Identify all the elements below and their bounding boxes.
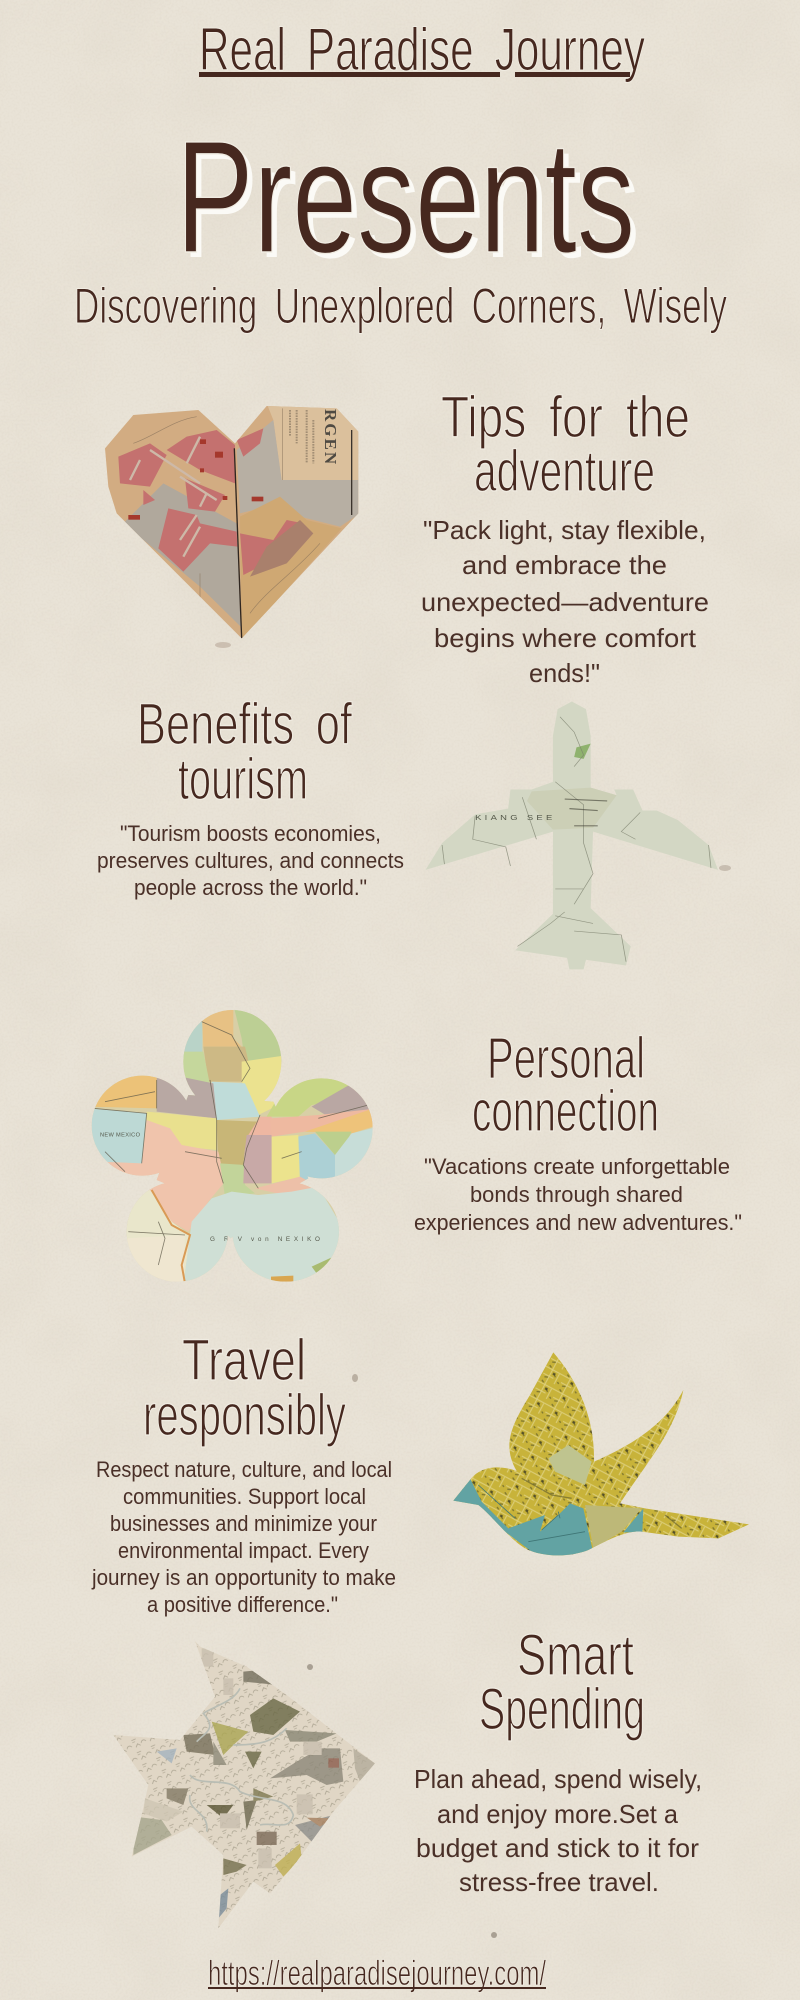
body text [414,1764,702,1897]
icon: origami map heart: RGEN [321,409,340,466]
body text: "Pack light, stay flexible, [423,515,706,545]
body text: budget and stick to it for [416,1833,699,1863]
heading: Benefits of [137,692,353,757]
body text [414,1154,742,1235]
body text: stress-free travel. [459,1867,659,1897]
panel: benefits of tourism [97,692,718,969]
body text: and enjoy more.Set a [437,1799,679,1829]
body text: journey is an opportunity to make [91,1565,396,1590]
body text: "Vacations create unforgettable [424,1154,730,1179]
body text: a positive difference." [147,1592,338,1617]
heading: Personal [487,1026,645,1091]
heading [479,1623,645,1742]
body text: unexpected—adventure [421,587,709,617]
heading [472,1026,659,1144]
main title: Presents: Presents [181,112,640,291]
heading: Travel [182,1328,306,1393]
icon: map airplane: KIANG SEE [475,813,556,822]
heading: tourism [178,747,308,812]
heading [441,385,690,504]
body text: "Tourism boosts economies, [120,821,381,846]
icon: map flower: NEW MEXICO [100,1133,141,1139]
body text: communities. Support local [123,1484,366,1509]
icon: map bird [454,1352,749,1556]
heading: connection [472,1079,659,1144]
heading: Spending [479,1677,645,1742]
body text: preserves cultures, and connects [97,848,404,873]
main title: Presents: Presents [176,107,635,286]
panel: smart spending [100,1623,702,1935]
body text [91,1457,396,1617]
icon: origami map heart [105,406,358,638]
heading [143,1328,346,1448]
icon: vintage map fish [114,1642,375,1928]
body text: people across the world." [134,875,367,900]
body text: ends!" [529,658,600,688]
icon: map airplane [426,701,718,969]
body text: Plan ahead, spend wisely, [414,1764,702,1794]
icon: map flower: G R V von NEXIKO [210,1236,320,1243]
heading: responsibly [143,1383,346,1448]
body text: and embrace the [462,550,667,580]
body text: businesses and minimize your [110,1511,377,1536]
icon: map flower [85,1005,380,1290]
heading: Tips for the [441,385,690,450]
body text [421,515,709,688]
heading: adventure [474,439,655,504]
panel: personal connection [85,1005,742,1290]
body text [97,821,404,900]
body text: bonds through shared [470,1182,683,1207]
panel: travel responsibly [91,1328,755,1617]
panel: tips for the adventure [100,385,709,688]
website link: https://realparadisejourney.com/ [208,1954,546,1993]
heading [137,692,353,812]
body text: environmental impact. Every [118,1538,369,1563]
heading: Smart [517,1623,634,1688]
body text: Respect nature, culture, and local [96,1457,392,1482]
body text: begins where comfort [434,623,697,653]
body text: experiences and new adventures." [414,1210,742,1235]
header [74,16,727,334]
